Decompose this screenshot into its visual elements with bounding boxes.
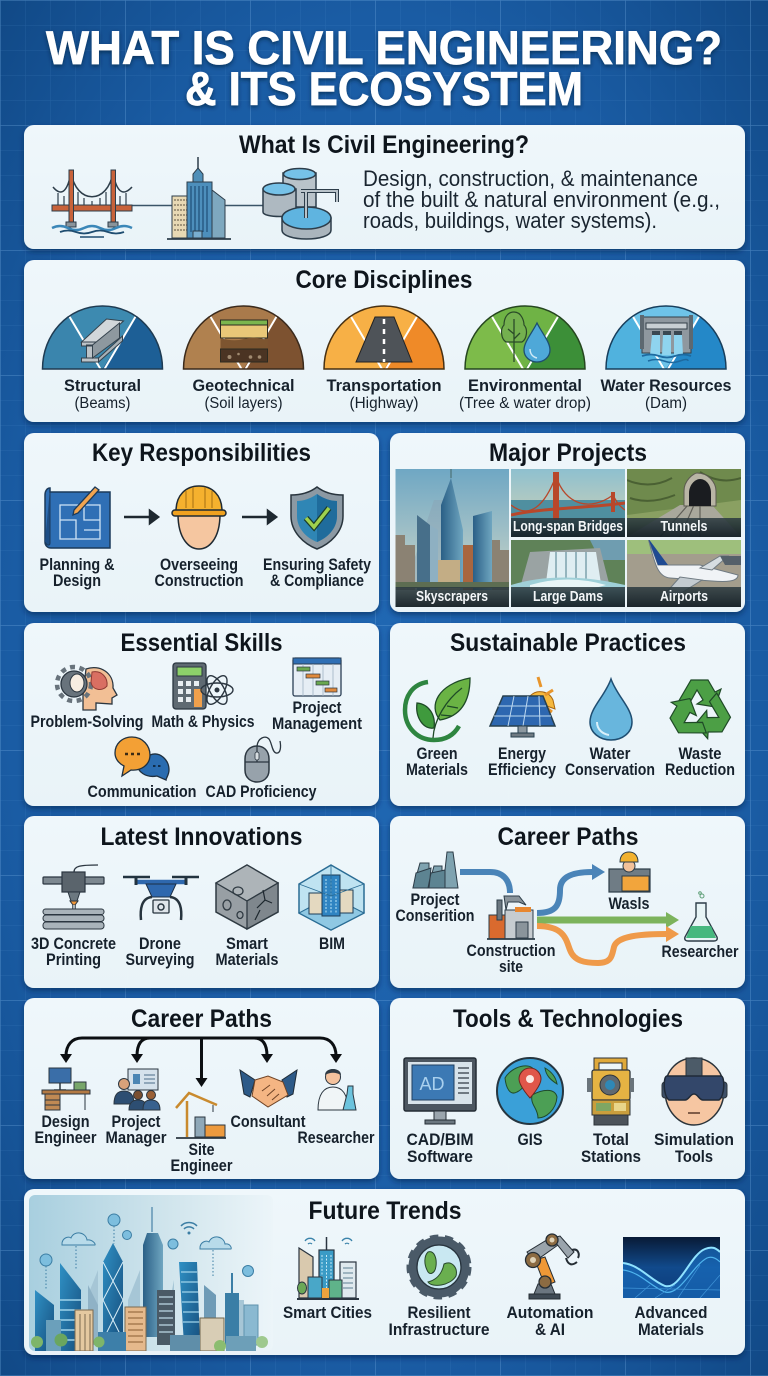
photo: tunnels [627,469,741,537]
panel: core disciplines [24,260,745,422]
heading: career paths: Career Paths [498,823,638,851]
icon: smart cities [297,1237,359,1299]
label: waste reduction: Reduction [665,761,735,779]
label: design engineer [34,1113,97,1147]
icon: construction site [487,896,535,939]
heading: core disciplines: Core Disciplines [296,266,472,294]
panel: sustainable practices [390,623,745,806]
icon: project manager [114,1069,160,1110]
icon: skyscraper [167,157,231,239]
panel: essential skills [24,623,379,806]
label: advanced materials [634,1304,708,1339]
heading: tools & technologies: Tools & Technologies [453,1005,683,1033]
icon: green leaf [405,678,470,740]
icon: researcher [318,1069,356,1110]
heading: career paths: Career Paths [131,1005,272,1033]
icon: crane [176,1093,226,1138]
label: resilient infrastructure: Resilient [408,1304,471,1322]
label: problem-solving: Problem-Solving [30,713,144,731]
icon: flask [685,892,717,941]
icon: speech bubbles [115,737,169,780]
icon: shield [291,487,343,549]
label: total stations: Total [593,1131,629,1149]
panel: tools and technologies [390,998,745,1179]
heading: essential skills: Essential Skills [120,629,282,657]
panel: career paths flow [390,816,745,988]
discipline: environmental: (Tree & water drop) [459,395,591,412]
branching arrows [60,1038,342,1087]
label: gis: GIS [518,1131,542,1149]
label: cad/bim software [406,1131,474,1166]
label: planning & design [40,556,115,590]
discipline: transportation: (Highway) [350,395,418,412]
icon: cad monitor: AD [419,1074,445,1094]
icon: vr headset [662,1058,727,1125]
arrow: orange to researcher [537,926,679,963]
heading: key responsibilities: Key Responsibilities [92,439,311,467]
label: total stations: Stations [581,1148,641,1166]
illustration: smart city skyline [29,1195,273,1352]
label: overseeing construction [154,556,244,590]
label: ensuring safety [263,556,372,590]
photo: skyscrapers [395,469,509,607]
label: simulation tools: Tools [675,1148,713,1166]
title [46,21,722,115]
label: automation & ai [506,1304,594,1339]
label: overseeing construction: Construction [154,572,244,590]
panel: career paths tree [24,998,379,1179]
icon: gis globe [497,1058,563,1124]
icon: bim cube [299,865,364,930]
photo: airports [627,538,741,607]
label: drone surveying [126,935,194,969]
label: drone surveying: Surveying [126,951,194,969]
label: simulation tools [654,1131,734,1166]
icon: cad monitor [404,1058,476,1124]
label: green materials: Green [416,745,458,763]
photo: long-span bridges [511,469,625,537]
label: project conserition: Project [410,891,460,909]
label: water conservation: Water [590,745,631,763]
label: project conserition: Conserition [396,907,474,925]
discipline: water resources: Water Resources [600,377,732,395]
label: project management [272,699,362,733]
label: green materials [406,745,468,779]
label: site engineer: Engineer [170,1157,233,1175]
label: project management: Management [272,715,362,733]
arrow [242,511,276,523]
label: planning & design: Planning & [40,556,115,574]
image: advanced materials wave [623,1237,720,1298]
discipline: environmental: Environmental [468,377,582,395]
label: resilient infrastructure: Infrastructure [388,1321,490,1339]
label: cad/bim software: Software [407,1148,473,1166]
discipline: geotechnical: (Soil layers) [204,395,282,412]
caption bar: Airports [660,588,708,605]
icon: factory [413,852,458,888]
arrow: blue to site [460,872,510,893]
label: resilient infrastructure [388,1304,490,1339]
label: project conserition [396,891,474,925]
icon: calculator and atom [173,663,233,709]
caption bar: Tunnels [660,518,708,535]
connector lines [130,204,264,206]
label: water conservation [565,745,655,779]
label: researcher: Researcher [662,943,739,961]
icon: design desk [42,1068,90,1110]
heading: sustainable practices: Sustainable Practices [450,629,686,657]
discipline: transportation [323,305,445,412]
label: researcher: Researcher [298,1129,375,1147]
label: planning & design: Design [53,572,101,590]
label: construction site: Construction [466,942,556,960]
label: design engineer: Design [42,1113,90,1131]
heading: major projects: Major Projects [489,439,647,467]
icon: water treatment tanks [263,168,337,239]
label: ensuring safety: Ensuring Safety [263,556,372,574]
label: site engineer: Site [188,1141,214,1159]
caption bar: Large Dams [533,588,603,605]
icon: water drop [590,679,632,740]
label: math & physics: Math & Physics [152,713,254,731]
label: 3d concrete printing [31,935,116,969]
icon: gantt chart [293,658,341,696]
label: communication: Communication [88,783,196,801]
label: total stations [581,1131,641,1166]
icon: robot arm [526,1234,579,1299]
icon: handshake [240,1070,297,1107]
icon: 3d printer [43,865,104,929]
label: advanced materials: Materials [638,1321,704,1339]
description: roads, buildings, water systems). [363,208,657,233]
discipline: water resources [600,299,736,412]
label: waste reduction: Waste [678,745,722,763]
arrow: green to researcher [537,912,679,928]
arrow: blue to worker [537,864,605,913]
label: automation & ai: & AI [535,1321,565,1339]
label: design engineer: Engineer [34,1129,97,1147]
discipline: geotechnical [182,305,304,412]
label: wasls: Wasls [608,895,650,913]
panel: what is civil engineering [24,125,745,249]
icon: blueprint [45,487,110,548]
discipline: structural: (Beams) [74,395,130,412]
icon: suspension bridge [52,170,132,237]
icon: helmet [172,486,226,549]
discipline: structural [42,305,164,412]
icon: recycling [664,680,737,745]
label: simulation tools: Simulation [654,1131,734,1149]
discipline: water resources: (Dam) [645,395,687,412]
label: project manager [106,1113,167,1147]
arrow [124,511,158,523]
title: & ITS ECOSYSTEM [185,62,583,115]
icon: solar panel [490,677,555,737]
panel: latest innovations [24,816,379,988]
icon: worker [609,852,650,892]
label: energy efficiency [488,745,557,779]
discipline: environmental [459,299,595,412]
icon: gear and head [57,667,117,710]
description [363,166,720,233]
label: smart materials [216,935,278,969]
icon: total station [587,1058,634,1125]
description: Design, construction, & maintenance [363,166,698,191]
discipline: transportation: Transportation [326,377,442,395]
label: smart materials: Smart [226,935,268,953]
icon: drone [123,877,199,920]
panel: future trends [24,1189,745,1355]
label: drone surveying: Drone [139,935,181,953]
label: energy efficiency: Efficiency [488,761,557,779]
label: consultant: Consultant [230,1113,306,1131]
caption bar: Long-span Bridges [513,518,623,535]
heading: what is civil engineering: What Is Civil Engineering? [239,131,529,159]
label: 3d concrete printing: Printing [46,951,101,969]
icon: resilient gear [410,1238,468,1296]
label: project management: Project [292,699,342,717]
label: green materials: Materials [406,761,468,779]
label: cad proficiency: CAD Proficiency [206,783,317,801]
label: waste reduction [665,745,735,779]
label: construction site [466,942,556,976]
label: project manager: Manager [106,1129,167,1147]
photo: large dams [511,540,625,607]
description: of the built & natural environment (e.g., [363,187,720,212]
label: cad/bim software: CAD/BIM [406,1131,474,1149]
caption bar: Skyscrapers [416,588,488,605]
title: WHAT IS CIVIL ENGINEERING? [46,21,722,74]
heading: latest innovations: Latest Innovations [100,823,302,851]
heading: future trends: Future Trends [308,1197,462,1225]
icon: computer mouse [245,737,281,782]
label: bim: BIM [319,935,345,953]
label: overseeing construction: Overseeing [160,556,238,574]
label: smart cities: Smart Cities [283,1304,372,1322]
label: water conservation: Conservation [565,761,655,779]
label: construction site: site [499,958,523,976]
discipline: structural: Structural [64,377,141,395]
panel: key responsibilities [24,433,379,612]
panel: major projects [390,433,745,612]
discipline: geotechnical: Geotechnical [192,377,294,395]
label: energy efficiency: Energy [498,745,547,763]
label: 3d concrete printing: 3D Concrete [31,935,116,953]
label: advanced materials: Advanced [634,1304,708,1322]
icon: smart material cube [216,865,278,929]
label: site engineer [170,1141,233,1175]
label: ensuring safety: & Compliance [270,572,364,590]
label: project manager: Project [112,1113,161,1131]
label: automation & ai: Automation [506,1304,594,1322]
label: smart materials: Materials [216,951,278,969]
